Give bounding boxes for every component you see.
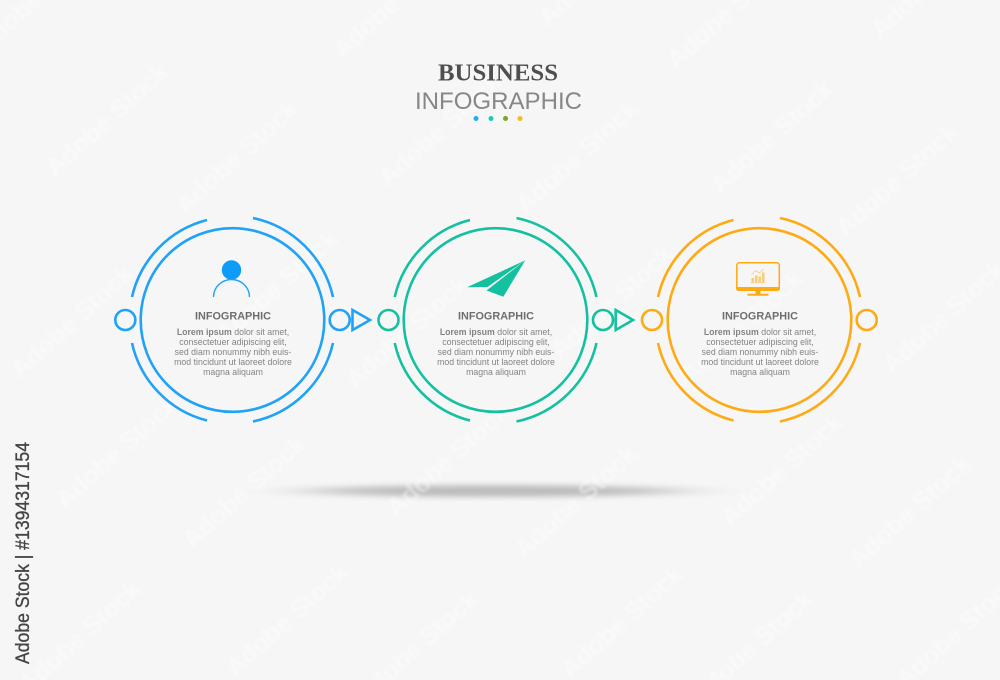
stock id caption: Adobe Stock | #1394317154 <box>13 442 34 664</box>
watermark pattern: Adobe Stock <box>209 223 345 349</box>
body text: magna aliquam <box>466 367 526 377</box>
watermark pattern: Adobe Stock <box>704 73 840 199</box>
heading: INFOGRAPHIC <box>722 310 798 322</box>
watermark pattern: Adobe Stock <box>829 116 965 242</box>
body text: sed diam nonummy nibh euis- <box>438 347 554 357</box>
arrow <box>352 310 370 330</box>
heading: INFOGRAPHIC <box>195 310 271 322</box>
icon: paper plane <box>467 260 525 297</box>
body text: magna aliquam <box>730 367 790 377</box>
heading: INFOGRAPHIC <box>458 310 534 322</box>
watermark pattern: Adobe Stock <box>674 263 810 389</box>
body text: Lorem ipsum dolor sit amet, <box>704 327 816 337</box>
arrow <box>616 310 633 330</box>
body text: consectetuer adipiscing elit, <box>442 337 550 347</box>
watermark pattern: Adobe Stock <box>714 406 850 532</box>
title dots <box>474 116 522 121</box>
icon: person <box>214 260 250 297</box>
rings <box>642 218 877 422</box>
body text <box>174 327 292 377</box>
panel: step 3 orange <box>642 218 877 422</box>
watermark pattern: Adobe Stock <box>544 238 680 364</box>
watermark pattern: Adobe Stock <box>4 258 140 384</box>
heading: infographic: INFOGRAPHIC <box>415 88 582 115</box>
watermark pattern: Adobe Stock <box>169 93 305 219</box>
watermark pattern: Adobe Stock <box>339 268 475 394</box>
watermark pattern: Adobe Stock <box>49 388 185 514</box>
watermark pattern: Adobe Stock <box>372 66 508 192</box>
icon: monitor with chart <box>736 263 780 296</box>
body text: mod tincidunt ut laoreet dolore <box>437 357 555 367</box>
title <box>415 60 582 121</box>
body text: magna aliquam <box>203 367 263 377</box>
body text: sed diam nonummy nibh euis- <box>175 347 291 357</box>
panel: step 1 blue <box>115 218 370 422</box>
watermark pattern: Adobe Stock <box>509 93 645 219</box>
watermark pattern: Adobe Stock <box>219 556 355 680</box>
body text: consectetuer adipiscing elit, <box>706 337 814 347</box>
watermark pattern: Adobe Stock <box>380 396 516 522</box>
panel: step 2 green <box>378 218 633 422</box>
body text: Lorem ipsum dolor sit amet, <box>440 327 552 337</box>
body text: Lorem ipsum dolor sit amet, <box>177 327 289 337</box>
watermark pattern: Adobe Stock <box>842 448 978 574</box>
body text <box>701 327 819 377</box>
body text: consectetuer adipiscing elit, <box>179 337 287 347</box>
body text <box>437 327 555 377</box>
rings <box>115 218 350 422</box>
watermark pattern: Adobe Stock <box>508 438 644 564</box>
body text: sed diam nonummy nibh euis- <box>702 347 818 357</box>
heading: business: BUSINESS <box>438 60 558 86</box>
rings <box>378 218 613 422</box>
body text: mod tincidunt ut laoreet dolore <box>174 357 292 367</box>
shadow under the diagram <box>310 485 680 497</box>
body text: mod tincidunt ut laoreet dolore <box>701 357 819 367</box>
watermark pattern: Adobe Stock <box>176 428 312 554</box>
watermark pattern: Adobe Stock <box>39 56 175 182</box>
